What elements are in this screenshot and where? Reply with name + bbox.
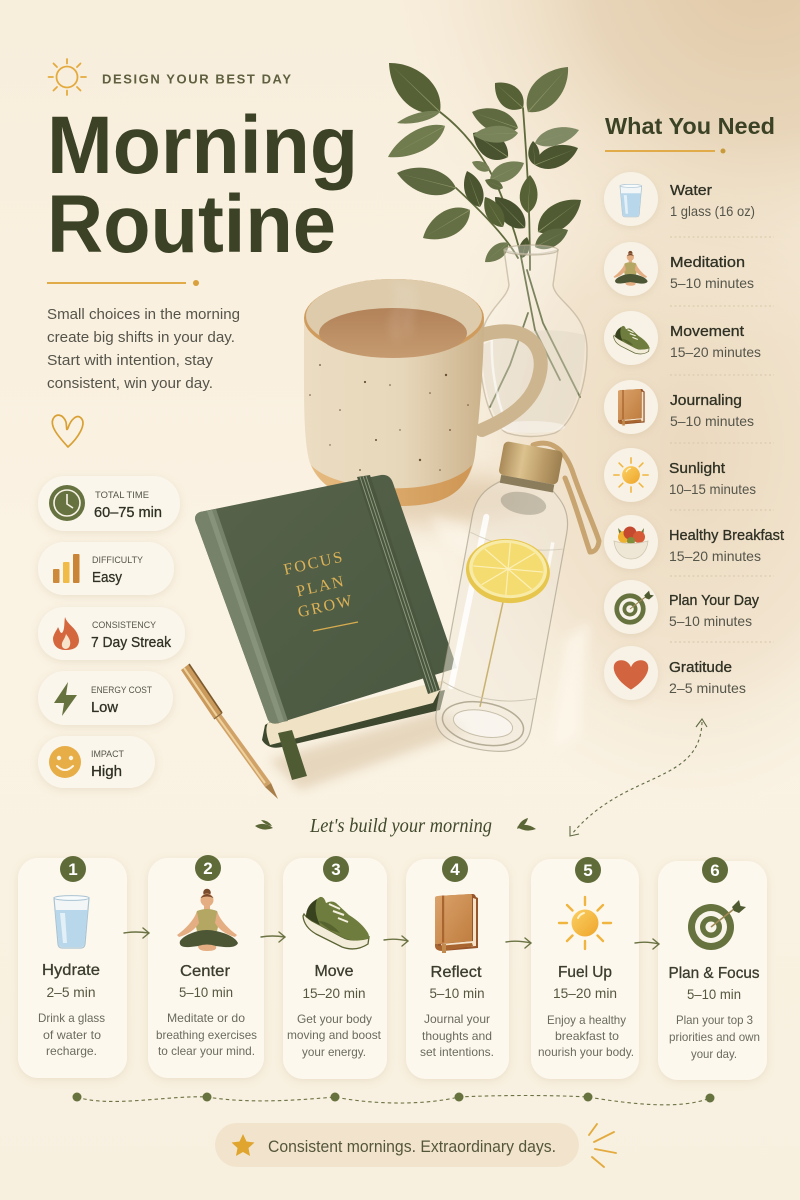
glass vase	[480, 245, 587, 436]
elastic band	[357, 475, 440, 694]
need: journaling: Journaling	[670, 393, 742, 409]
mug body	[304, 318, 484, 506]
intro paragraph: create big shifts in your day.	[47, 329, 235, 346]
step 3: move: Get your body	[297, 1012, 372, 1026]
step 3: move: moving and boost	[287, 1028, 382, 1042]
handwritten subheading: Let's build your morning	[309, 815, 492, 837]
plant in glass vase	[377, 52, 588, 437]
strap	[533, 443, 599, 552]
arrows between steps	[124, 928, 659, 949]
need: water	[604, 172, 755, 226]
bottle body	[431, 477, 574, 758]
stat: energy cost	[38, 671, 173, 725]
stat pills	[38, 476, 185, 788]
step 3: move	[283, 856, 387, 1079]
step 5: fuel up: nourish your body.	[538, 1045, 634, 1059]
need: water: Water	[670, 183, 712, 199]
stat: consistency: CONSISTENCY	[92, 620, 157, 631]
step 3: move: your energy.	[302, 1045, 366, 1059]
step 4: reflect	[406, 856, 509, 1079]
step 6: plan and focus: Plan & Focus	[668, 965, 760, 982]
front cover	[195, 475, 457, 724]
step 2: center: Meditate or do	[167, 1011, 245, 1025]
need: plan your day: Plan Your Day	[669, 593, 760, 609]
steam	[394, 282, 412, 340]
need: gratitude: Gratitude	[669, 660, 732, 676]
need: plan your day	[604, 580, 760, 634]
stat: total time	[38, 476, 180, 531]
need: gratitude	[604, 646, 746, 700]
title: Morning	[47, 100, 358, 191]
speckles	[309, 364, 469, 471]
need: plan your day: 5–10 minutes	[669, 613, 752, 629]
need: movement: Movement	[670, 324, 744, 340]
water bottle with lemon	[431, 438, 599, 758]
step 6: plan and focus: Plan your top 3	[676, 1013, 753, 1027]
photo: soft shadows and light	[270, 474, 590, 790]
back cover and page block	[262, 690, 445, 748]
step 4: reflect: 5–10 min	[430, 985, 484, 1001]
gold pen	[181, 664, 278, 799]
step 4: reflect: set intentions.	[420, 1045, 494, 1059]
need: meditation: Meditation	[670, 255, 745, 271]
step 3: move: 3	[331, 860, 341, 879]
need: movement	[604, 311, 761, 365]
need: sunlight: Sunlight	[669, 461, 725, 477]
icon: hand-drawn heart	[52, 415, 83, 447]
need: sunlight	[604, 448, 756, 502]
bottle highlights	[451, 516, 486, 687]
step 2: center: 5–10 min	[179, 984, 233, 1000]
what you need panel	[604, 113, 784, 700]
icon: fruit bowl	[614, 526, 648, 559]
step 2: center: 2	[203, 859, 213, 878]
stat: consistency: 7 Day Streak	[91, 634, 171, 651]
need: journaling	[604, 380, 754, 434]
dotted timeline	[72, 1092, 714, 1105]
lemon slice	[463, 535, 553, 607]
step 6: plan and focus: priorities and own	[669, 1030, 760, 1044]
stat: difficulty: Easy	[92, 569, 122, 586]
mug rim and coffee	[304, 279, 484, 357]
intro paragraph: consistent, win your day.	[47, 375, 213, 392]
stem and base	[480, 594, 505, 708]
need: healthy breakfast: 15–20 minutes	[669, 548, 761, 564]
intro paragraph	[47, 306, 240, 392]
spine highlight	[195, 509, 288, 724]
step 2: center: breathing exercises	[156, 1028, 257, 1042]
step 3: move: 15–20 min	[302, 985, 366, 1001]
need: movement: 15–20 minutes	[670, 344, 761, 360]
bottle cap	[498, 441, 563, 485]
icon: sparkle rays	[589, 1124, 616, 1167]
cover text: FOCUS	[282, 548, 346, 579]
stat: energy cost: ENERGY COST	[91, 685, 152, 696]
eyebrow: design your best day: DESIGN YOUR BEST DAY	[102, 72, 291, 86]
step 4: reflect: Reflect	[430, 964, 482, 981]
step 5: fuel up: 5	[583, 861, 593, 880]
step cards	[18, 855, 767, 1080]
closing banner: Consistent mornings. Extraordinary days.	[268, 1137, 556, 1156]
dashed curved arrow	[570, 719, 707, 836]
step 5: fuel up: breakfast to	[555, 1029, 619, 1043]
step 6: plan and focus: 5–10 min	[687, 986, 741, 1002]
stat: difficulty: DIFFICULTY	[92, 555, 144, 566]
stems	[440, 108, 580, 407]
intro paragraph: Small choices in the morning	[47, 306, 240, 323]
step 5: fuel up	[531, 857, 639, 1079]
step 4: reflect: Journal your	[424, 1012, 490, 1026]
coffee mug	[304, 279, 541, 506]
need: gratitude: 2–5 minutes	[669, 680, 746, 696]
notebook	[195, 475, 457, 780]
intro paragraph: Start with intention, stay	[47, 352, 214, 369]
step 6: plan and focus: 6	[710, 861, 720, 880]
need: healthy breakfast: Healthy Breakfast	[669, 528, 784, 544]
icon: star	[232, 1134, 254, 1156]
step 4: reflect: thoughts and	[422, 1029, 492, 1043]
need: meditation	[604, 242, 754, 296]
need: sunlight: 10–15 minutes	[669, 481, 756, 497]
step 3: move: Move	[314, 963, 354, 980]
step 1: hydrate: 1	[68, 860, 78, 879]
need: water: 1 glass (16 oz)	[670, 203, 755, 219]
step 5: fuel up: Enjoy a healthy	[547, 1013, 626, 1027]
step 2: center: Center	[180, 963, 231, 980]
step 6: plan and focus: your day.	[691, 1047, 737, 1061]
title divider	[47, 280, 199, 286]
step 5: fuel up: 15–20 min	[553, 985, 617, 1001]
leaves	[377, 52, 588, 268]
clay base	[311, 465, 472, 506]
title: Routine	[47, 179, 336, 270]
step 5: fuel up: Fuel Up	[558, 964, 612, 981]
icon: leaf accent left	[255, 820, 273, 830]
need: healthy breakfast	[604, 515, 784, 569]
stat: impact	[38, 736, 155, 788]
stat: impact: IMPACT	[91, 749, 124, 760]
step 2: center: to clear your mind.	[158, 1044, 255, 1058]
step 1: hydrate: Hydrate	[42, 962, 100, 979]
step 1: hydrate	[18, 856, 127, 1078]
cover text: GROW	[296, 592, 356, 621]
stat: impact: High	[91, 763, 122, 780]
step 1: hydrate: 2–5 min	[46, 984, 96, 1000]
stat: energy cost: Low	[91, 699, 118, 716]
stat: total time: 60–75 min	[94, 504, 162, 521]
icon: leaf accent right	[517, 818, 536, 831]
stat: consistency	[38, 607, 185, 660]
stat: total time: TOTAL TIME	[95, 490, 149, 501]
eyebrow: design your best day	[48, 59, 291, 95]
ribbon bookmark	[278, 730, 307, 780]
stat: difficulty	[38, 542, 174, 595]
need: meditation: 5–10 minutes	[670, 275, 754, 291]
closing banner	[215, 1123, 579, 1167]
step 1: hydrate: of water to	[43, 1028, 101, 1042]
cover text	[282, 548, 356, 621]
cover text: PLAN	[295, 573, 347, 600]
step 2: center	[148, 855, 264, 1078]
panel heading: What You Need	[605, 113, 775, 139]
mug handle	[482, 331, 541, 430]
step 4: reflect: 4	[450, 860, 460, 879]
icon: sun outline	[48, 59, 86, 95]
step 1: hydrate: Drink a glass	[38, 1011, 105, 1025]
step 6: plan and focus	[658, 857, 767, 1080]
title	[47, 100, 358, 270]
need: journaling: 5–10 minutes	[670, 413, 754, 429]
step 1: hydrate: recharge.	[46, 1044, 97, 1058]
